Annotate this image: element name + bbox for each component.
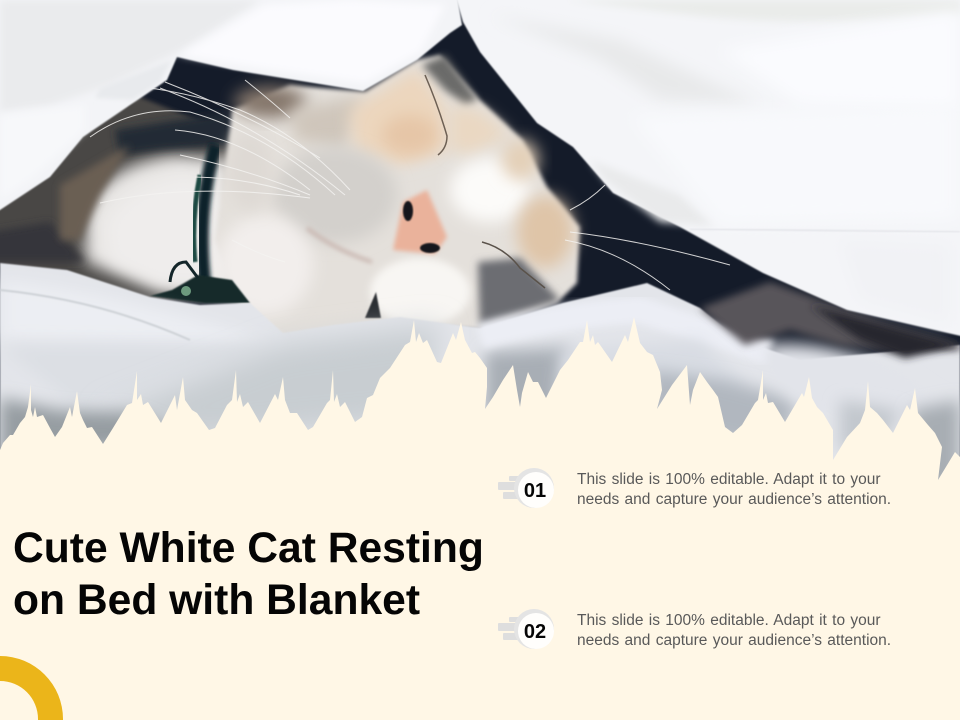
title: on Bed with Blanket: [13, 576, 420, 624]
title: [13, 524, 484, 624]
text block 01: This slide is 100% editable. Adapt it to your: [577, 471, 881, 488]
photo: cat sleeping under white blanket: [0, 0, 960, 500]
text block 01: needs and capture your audience’s attention.: [577, 490, 891, 508]
dark hollow under the blanket: [0, 0, 960, 500]
bottom sheet: [0, 263, 960, 500]
icon: number badge 02: 02: [524, 621, 546, 643]
text block 02: needs and capture your audience’s attention.: [577, 632, 891, 648]
icon: number badge 02: [498, 609, 554, 649]
icon: number badge 01: 01: [524, 480, 546, 502]
closed cat eyes: [425, 75, 545, 288]
shadow between blanket and lower sheet: [700, 282, 960, 358]
blanket top right: [455, 0, 960, 337]
text block 02: [577, 612, 891, 648]
title: Cute White Cat Resting: [13, 524, 484, 572]
whiskers: [85, 80, 730, 290]
blanket top left: [0, 0, 462, 212]
decorative yellow ring: [0, 656, 63, 720]
torn paper edge cream panel: [0, 317, 960, 720]
cat nose: [393, 190, 447, 254]
text block 01: [577, 471, 891, 508]
icon: number badge 01: [498, 468, 554, 508]
cat face: [215, 55, 580, 340]
cat body and shadowed fur: [0, 95, 240, 300]
green collar and bell: [150, 145, 250, 303]
text block 02: This slide is 100% editable. Adapt it to your: [577, 612, 881, 629]
